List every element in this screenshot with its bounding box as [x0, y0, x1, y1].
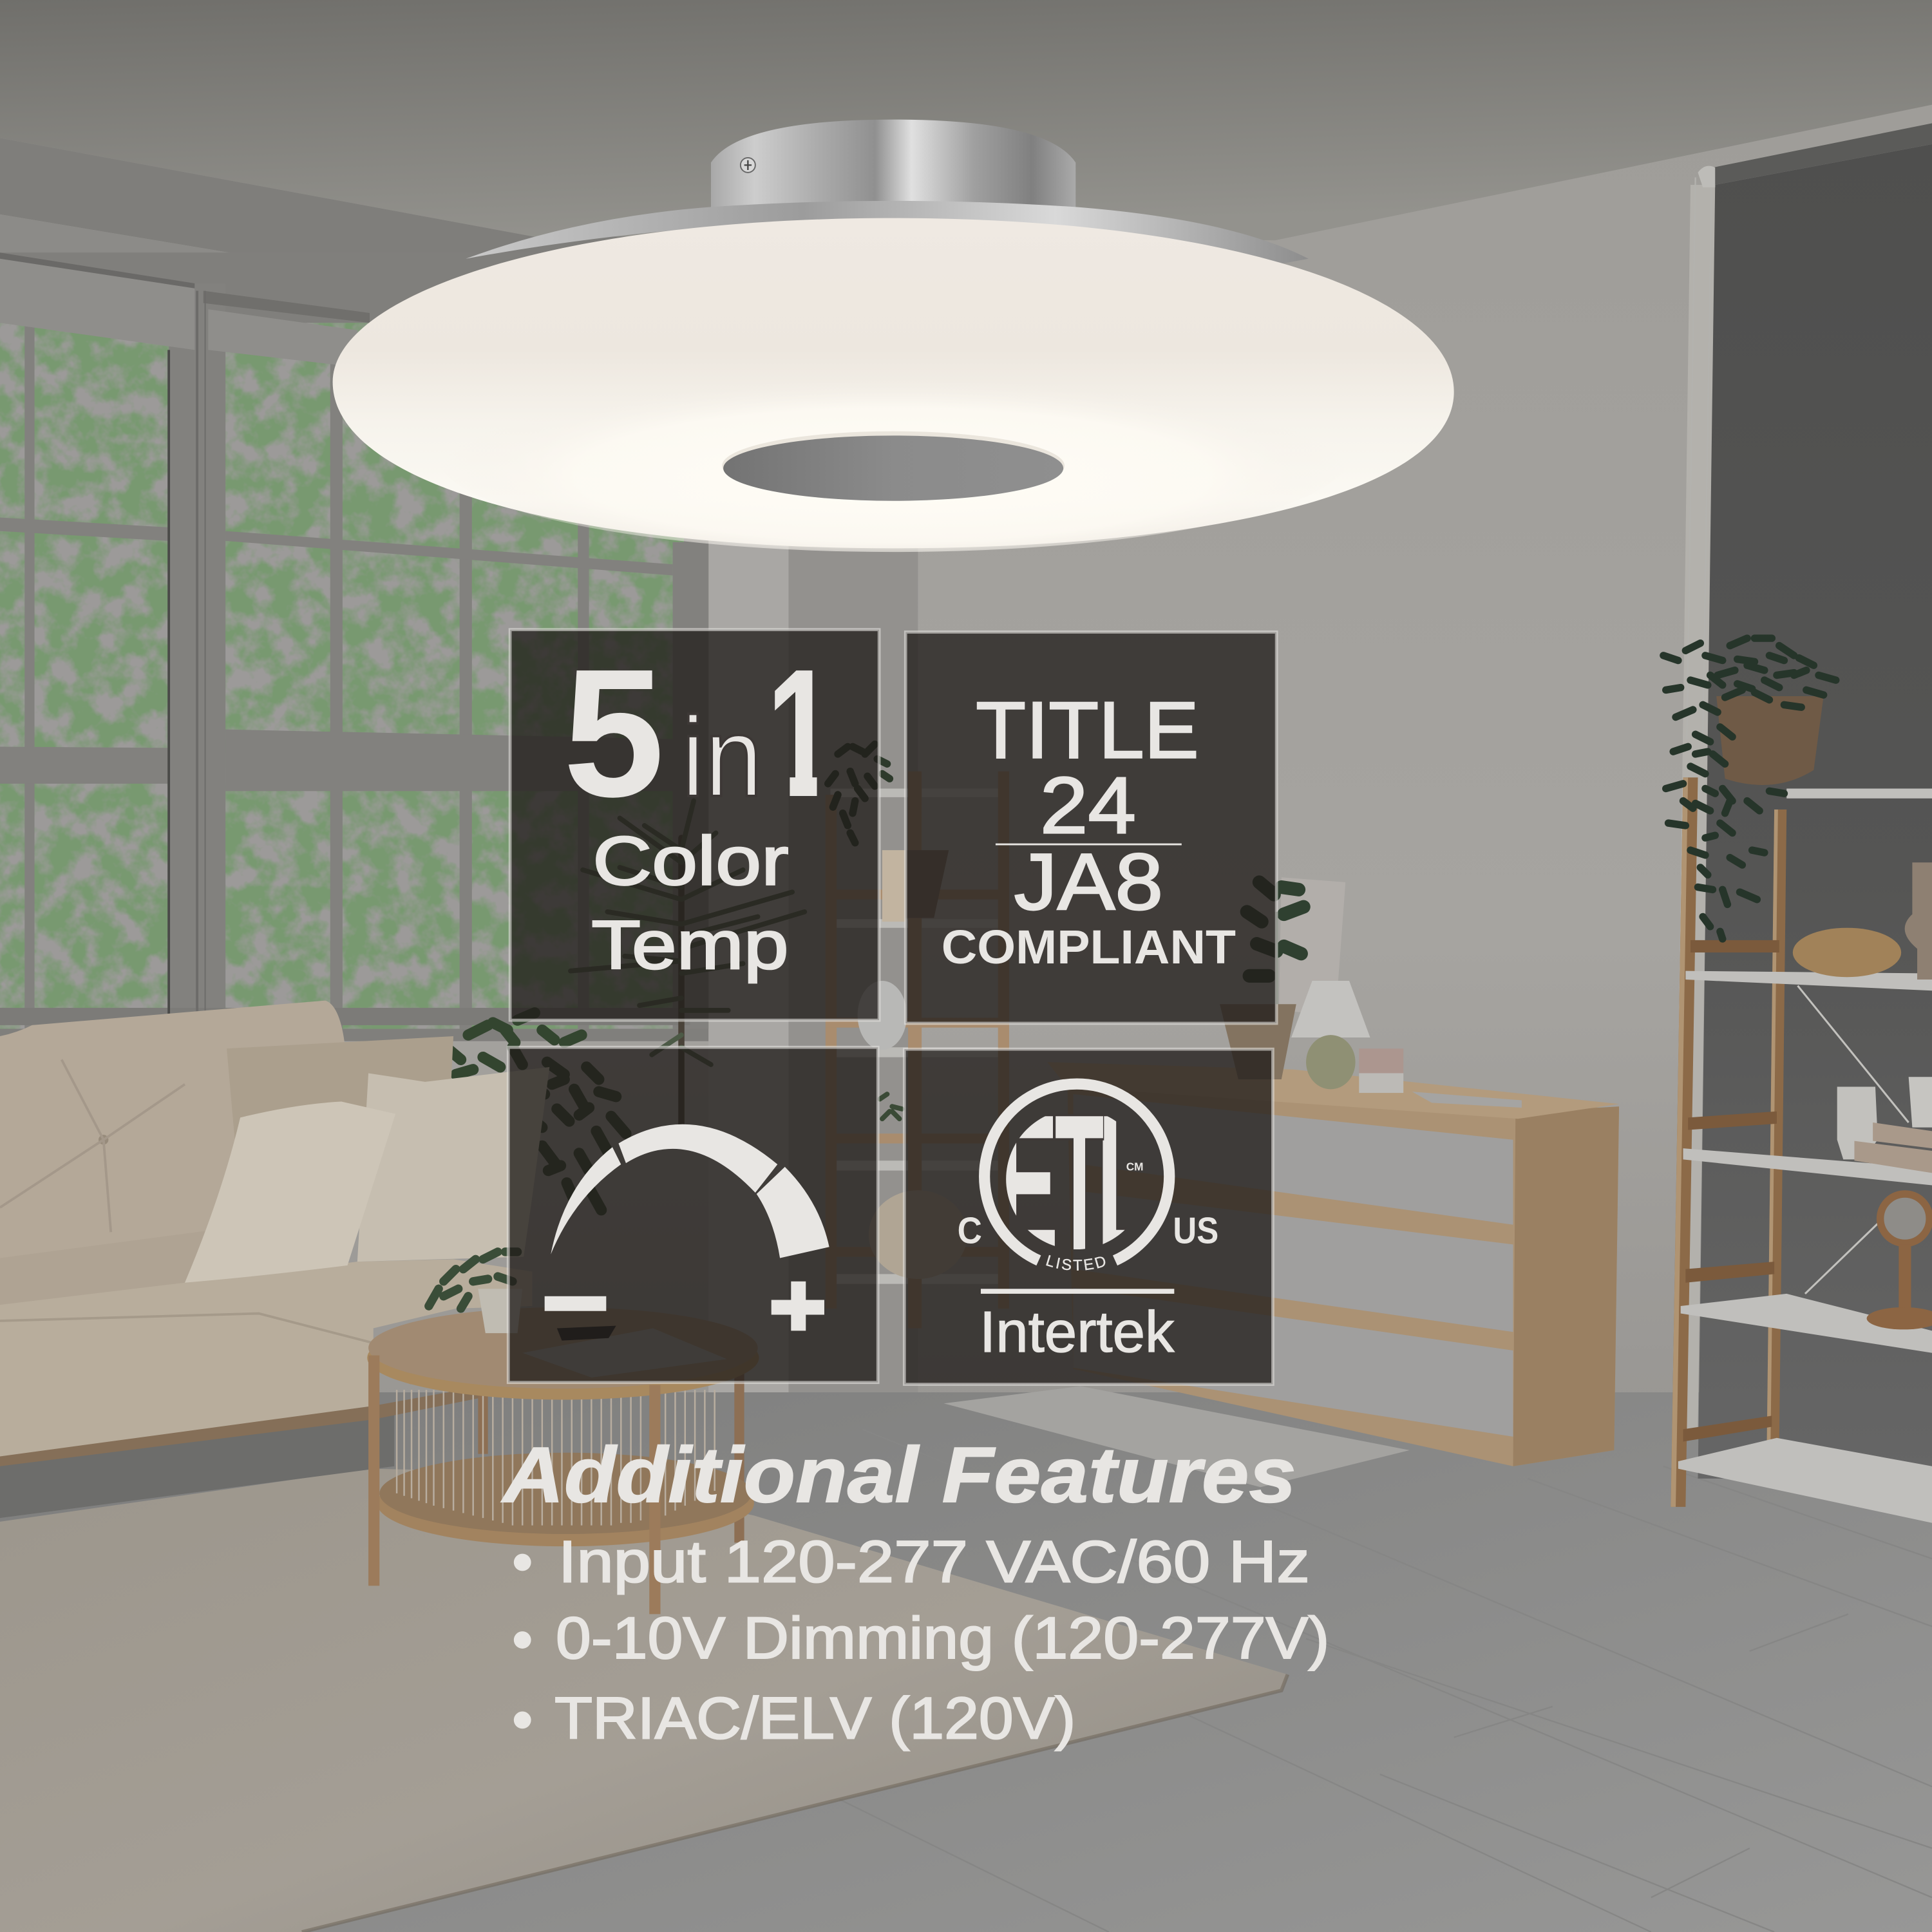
books on shelf: [882, 850, 905, 922]
table phone: [557, 1326, 616, 1341]
shelf boards: [1678, 788, 1932, 1523]
window glass with foliage: [0, 323, 684, 1029]
minus: [545, 1296, 606, 1311]
beam: [0, 138, 739, 333]
glass lantern: [858, 981, 907, 1050]
gauge middle segment: [618, 1124, 777, 1193]
intertek: Intertek: [980, 1300, 1175, 1365]
rear pillow: [227, 1036, 453, 1146]
book stack: [1854, 1141, 1932, 1173]
ceiling: [0, 0, 1932, 240]
table wires: [397, 1390, 715, 1526]
small floor rug: [944, 1386, 1410, 1487]
plus: [772, 1282, 824, 1331]
hanging plant on shelf: [828, 744, 889, 843]
features heading: Additional Features: [500, 1430, 1296, 1519]
seat lower band: [0, 1231, 209, 1306]
additional features: [500, 1430, 1329, 1752]
lower table shelf: [377, 1460, 754, 1546]
shelf small plant: [880, 1094, 902, 1119]
sofa shadow: [0, 1405, 394, 1518]
gauge low segment: [551, 1147, 621, 1255]
numeral 1: 1: [766, 632, 835, 835]
sofa: [0, 1001, 549, 1518]
metal rim: [466, 201, 1309, 263]
gauge high segment: [757, 1167, 829, 1258]
number 24: 24: [1040, 761, 1136, 850]
table plant pot: [478, 1289, 522, 1333]
temp: Temp: [591, 906, 788, 983]
right shelf: [1671, 777, 1932, 1523]
feature: input voltage: Input 120-277 VAC/60 Hz: [558, 1530, 1310, 1595]
ceiling light fixture: [333, 120, 1454, 552]
outer ring: [985, 1084, 1170, 1260]
panel: title 24 ja8: [905, 632, 1276, 1023]
ladder rungs: [1690, 940, 1779, 952]
dresser: [1047, 1062, 1619, 1466]
dresser decor: [1220, 877, 1522, 1108]
middle bookshelf: [826, 744, 1009, 1328]
hanging plant: [1663, 638, 1836, 939]
cup: [1359, 1048, 1403, 1073]
roller shades: [0, 258, 194, 350]
side table: [367, 1252, 759, 1614]
plant basket: [1716, 696, 1824, 785]
canopy: [711, 120, 1075, 212]
panel: 5 in 1 color temp: [510, 630, 879, 1020]
floor: [0, 1392, 1932, 1932]
table magazine: [522, 1328, 727, 1378]
woven basket: [869, 1190, 967, 1279]
cm: CM: [1126, 1160, 1143, 1173]
seat cushion: [0, 1259, 533, 1456]
ladder posts: [1671, 777, 1698, 1507]
window: [0, 252, 708, 1041]
tree in recess: [571, 801, 804, 1146]
table lamp: [1291, 981, 1370, 1037]
word in: in: [681, 694, 762, 820]
potted plant: [1220, 1004, 1296, 1079]
plant behind sofa: [446, 1013, 626, 1210]
button tuft: [99, 1135, 108, 1144]
etl logo: [958, 1078, 1218, 1289]
divider: [996, 844, 1182, 845]
right blind and chain: [1673, 123, 1932, 1479]
window frames: [0, 283, 708, 1029]
logo rule: [981, 1289, 1174, 1294]
plant leaves: [1663, 638, 1836, 939]
table top: [367, 1316, 759, 1399]
panel: etl listed: [903, 1047, 1274, 1386]
window recess wall: [708, 542, 788, 1392]
back wall: [0, 0, 1932, 1479]
etl letters: E: [997, 1074, 1058, 1294]
ja8: JA8: [1014, 837, 1163, 927]
table legs front: [368, 1356, 379, 1586]
panel: dimming gauge: [508, 1047, 878, 1383]
sofa frame: [0, 1383, 502, 1466]
cream pillow front: [185, 1101, 395, 1283]
large rug: [0, 1469, 1287, 1932]
us: US: [1173, 1210, 1218, 1251]
etl letters: [1006, 1116, 1125, 1249]
papers: [1412, 1092, 1522, 1108]
framed picture: [1279, 877, 1345, 1016]
table legs rear: [478, 1380, 488, 1454]
cream pillow back: [357, 1067, 549, 1262]
shelf wires: [1797, 986, 1909, 1294]
compliant: COMPLIANT: [942, 920, 1236, 974]
listed: LISTED: [1046, 1255, 1105, 1271]
woven bowl: [1793, 928, 1901, 977]
white cups: [1837, 1087, 1878, 1159]
title: TITLE: [976, 686, 1199, 775]
shade glow: [437, 360, 1349, 552]
glass shade: [333, 218, 1454, 548]
floor planks: [788, 1429, 1932, 1932]
c: C: [958, 1210, 982, 1251]
color: Color: [592, 822, 788, 900]
center disc: [722, 431, 1065, 501]
ring sculpture: [1880, 1194, 1929, 1243]
screw: [741, 158, 755, 173]
etl letters: T: [1055, 1074, 1104, 1294]
numeral 5: 5: [563, 632, 665, 835]
etl logo: L: [1097, 1074, 1153, 1294]
feature: triac elv: TRIAC/ELV (120V): [554, 1686, 1075, 1752]
back cushion: [0, 1001, 345, 1263]
feature: 0-10v dimming: 0-10V Dimming (120-277V): [556, 1605, 1329, 1671]
ceramic vase: [1905, 862, 1932, 980]
drawers: [1073, 1094, 1513, 1437]
